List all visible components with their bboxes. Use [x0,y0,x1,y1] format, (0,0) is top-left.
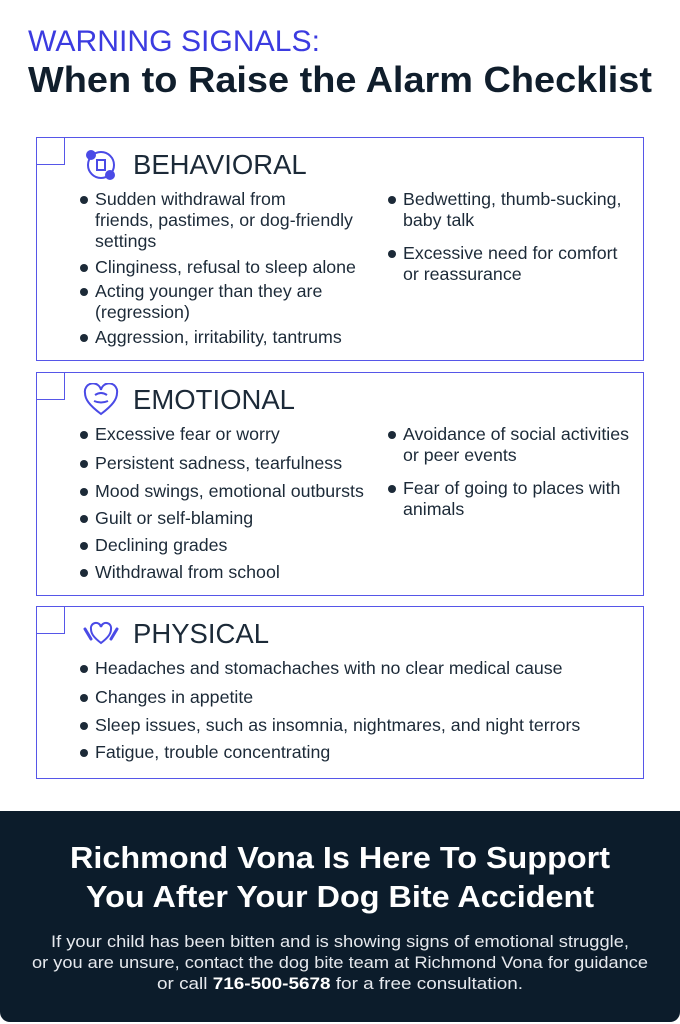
icon: heart brain [84,383,118,416]
right column list: Excessive need for comfort [403,243,617,263]
left column list: Clinginess, refusal to sleep alone [95,257,356,277]
list: Fatigue, trouble concentrating [95,742,330,762]
left column list: Acting younger than they are [95,281,322,301]
title: When to Raise the Alarm Checklist [28,59,652,100]
right column list: or peer events [403,445,517,465]
left column list: Excessive fear or worry [95,424,280,444]
left column list: Declining grades [95,535,227,555]
right column list: animals [403,499,464,519]
heading: behavioral: BEHAVIORAL [133,149,307,180]
footer text: If your child has been bitten and is showing signs of emotional struggle, [51,932,629,951]
heading: physical: PHYSICAL [133,618,269,649]
left column list [80,189,356,347]
footer text: or call 716-500-5678 for a free consultation. [157,974,523,993]
right column list: or reassurance [403,264,522,284]
panel: behavioral [36,137,644,361]
list [80,658,580,762]
panel: emotional [36,372,644,596]
left column list: Persistent sadness, tearfulness [95,453,342,473]
left column list: Aggression, irritability, tantrums [95,327,342,347]
title [28,25,652,100]
icon: hands heart [83,622,119,644]
left column list: friends, pastimes, or dog-friendly [95,210,353,230]
footer panel [0,811,680,1022]
footer heading: Richmond Vona Is Here To Support [70,840,610,875]
left column list [80,424,364,582]
left column list: settings [95,231,156,251]
right column list: Bedwetting, thumb-sucking, [403,189,621,209]
heading: emotional: EMOTIONAL [133,384,295,415]
title: WARNING SIGNALS: [28,25,320,58]
list: Changes in appetite [95,687,253,707]
right column list: Fear of going to places with [403,478,620,498]
left column list: Withdrawal from school [95,562,280,582]
right column list [388,424,629,519]
left column list: (regression) [95,302,190,322]
left column list: Mood swings, emotional outbursts [95,481,364,501]
right column list: Avoidance of social activities [403,424,629,444]
footer heading [70,840,610,914]
left column list: Sudden withdrawal from [95,189,286,209]
panel: physical [36,606,644,779]
icon: brain gears [86,150,115,180]
footer text: or you are unsure, contact the dog bite team at Richmond Vona for guidance [32,953,648,972]
footer text [32,932,648,993]
left column list: Guilt or self-blaming [95,508,253,528]
footer heading: You After Your Dog Bite Accident [86,879,594,914]
right column list: baby talk [403,210,474,230]
list: Headaches and stomachaches with no clear medical cause [95,658,563,678]
list: Sleep issues, such as insomnia, nightmares, and night terrors [95,715,580,735]
right column list [388,189,621,284]
